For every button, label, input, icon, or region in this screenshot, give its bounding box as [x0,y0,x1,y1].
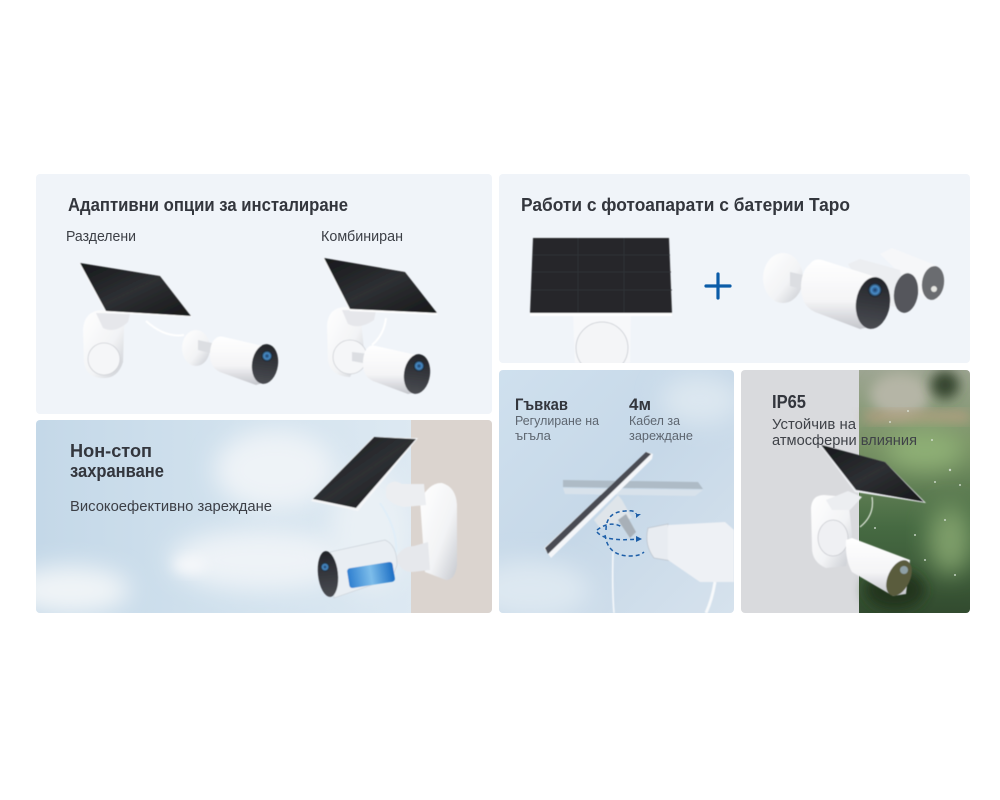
text: weather resistant: атмосферни влияния [772,433,917,449]
text: flexible [515,398,599,440]
product: wall-mounted solar camera in rain [811,445,926,600]
product: combined solar panel and camera [323,258,438,396]
text: flexible: ъгъла [515,428,552,443]
heading: non-stop power: Нон-стоп [70,440,152,461]
product: solar panel front [530,238,672,374]
product: three Tapo cameras [763,248,946,331]
text: high-efficiency charging: Високоефективно зареждане [70,498,272,515]
text: 4m cable: Кабел за [629,413,681,428]
text: weather resistant: Устойчив на [772,417,857,433]
label: separated: Разделени [66,228,136,245]
panel: works with Tapo battery cameras [499,174,970,374]
text: 4m cable: зареждане [629,428,693,443]
heading: compatible cameras: Работи с фотоапарати с батерии Таро [521,194,850,215]
label: combined: Комбиниран [321,228,403,245]
heading: installation options: Адаптивни опции за инсталиране [68,194,348,215]
text: flexible: Гъвкав [515,395,568,414]
text: 4m cable [629,395,693,443]
panel: non-stop power [10,420,492,614]
text: weather resistant [772,417,917,449]
icon: plus [706,274,730,298]
heading: non-stop power: захранване [70,460,164,481]
product: wall-mounted solar camera with battery [311,437,457,598]
panel: flexible angle and 4m cable [499,370,734,613]
heading: IP65: IP65 [772,392,806,412]
product: tilted solar panel with ghost position [544,452,734,613]
panel: IP65 weather resistance [741,370,972,613]
wall [411,420,492,613]
text: 4m cable: 4м [629,395,651,414]
product: separated solar panel and camera [79,263,281,386]
rain drops [874,410,961,576]
text: flexible: Регулиране на [515,413,600,428]
panel: installation options [36,174,492,414]
heading: non-stop power [70,444,164,481]
outdoor background [859,370,972,613]
arrows: rotation range [597,511,644,556]
